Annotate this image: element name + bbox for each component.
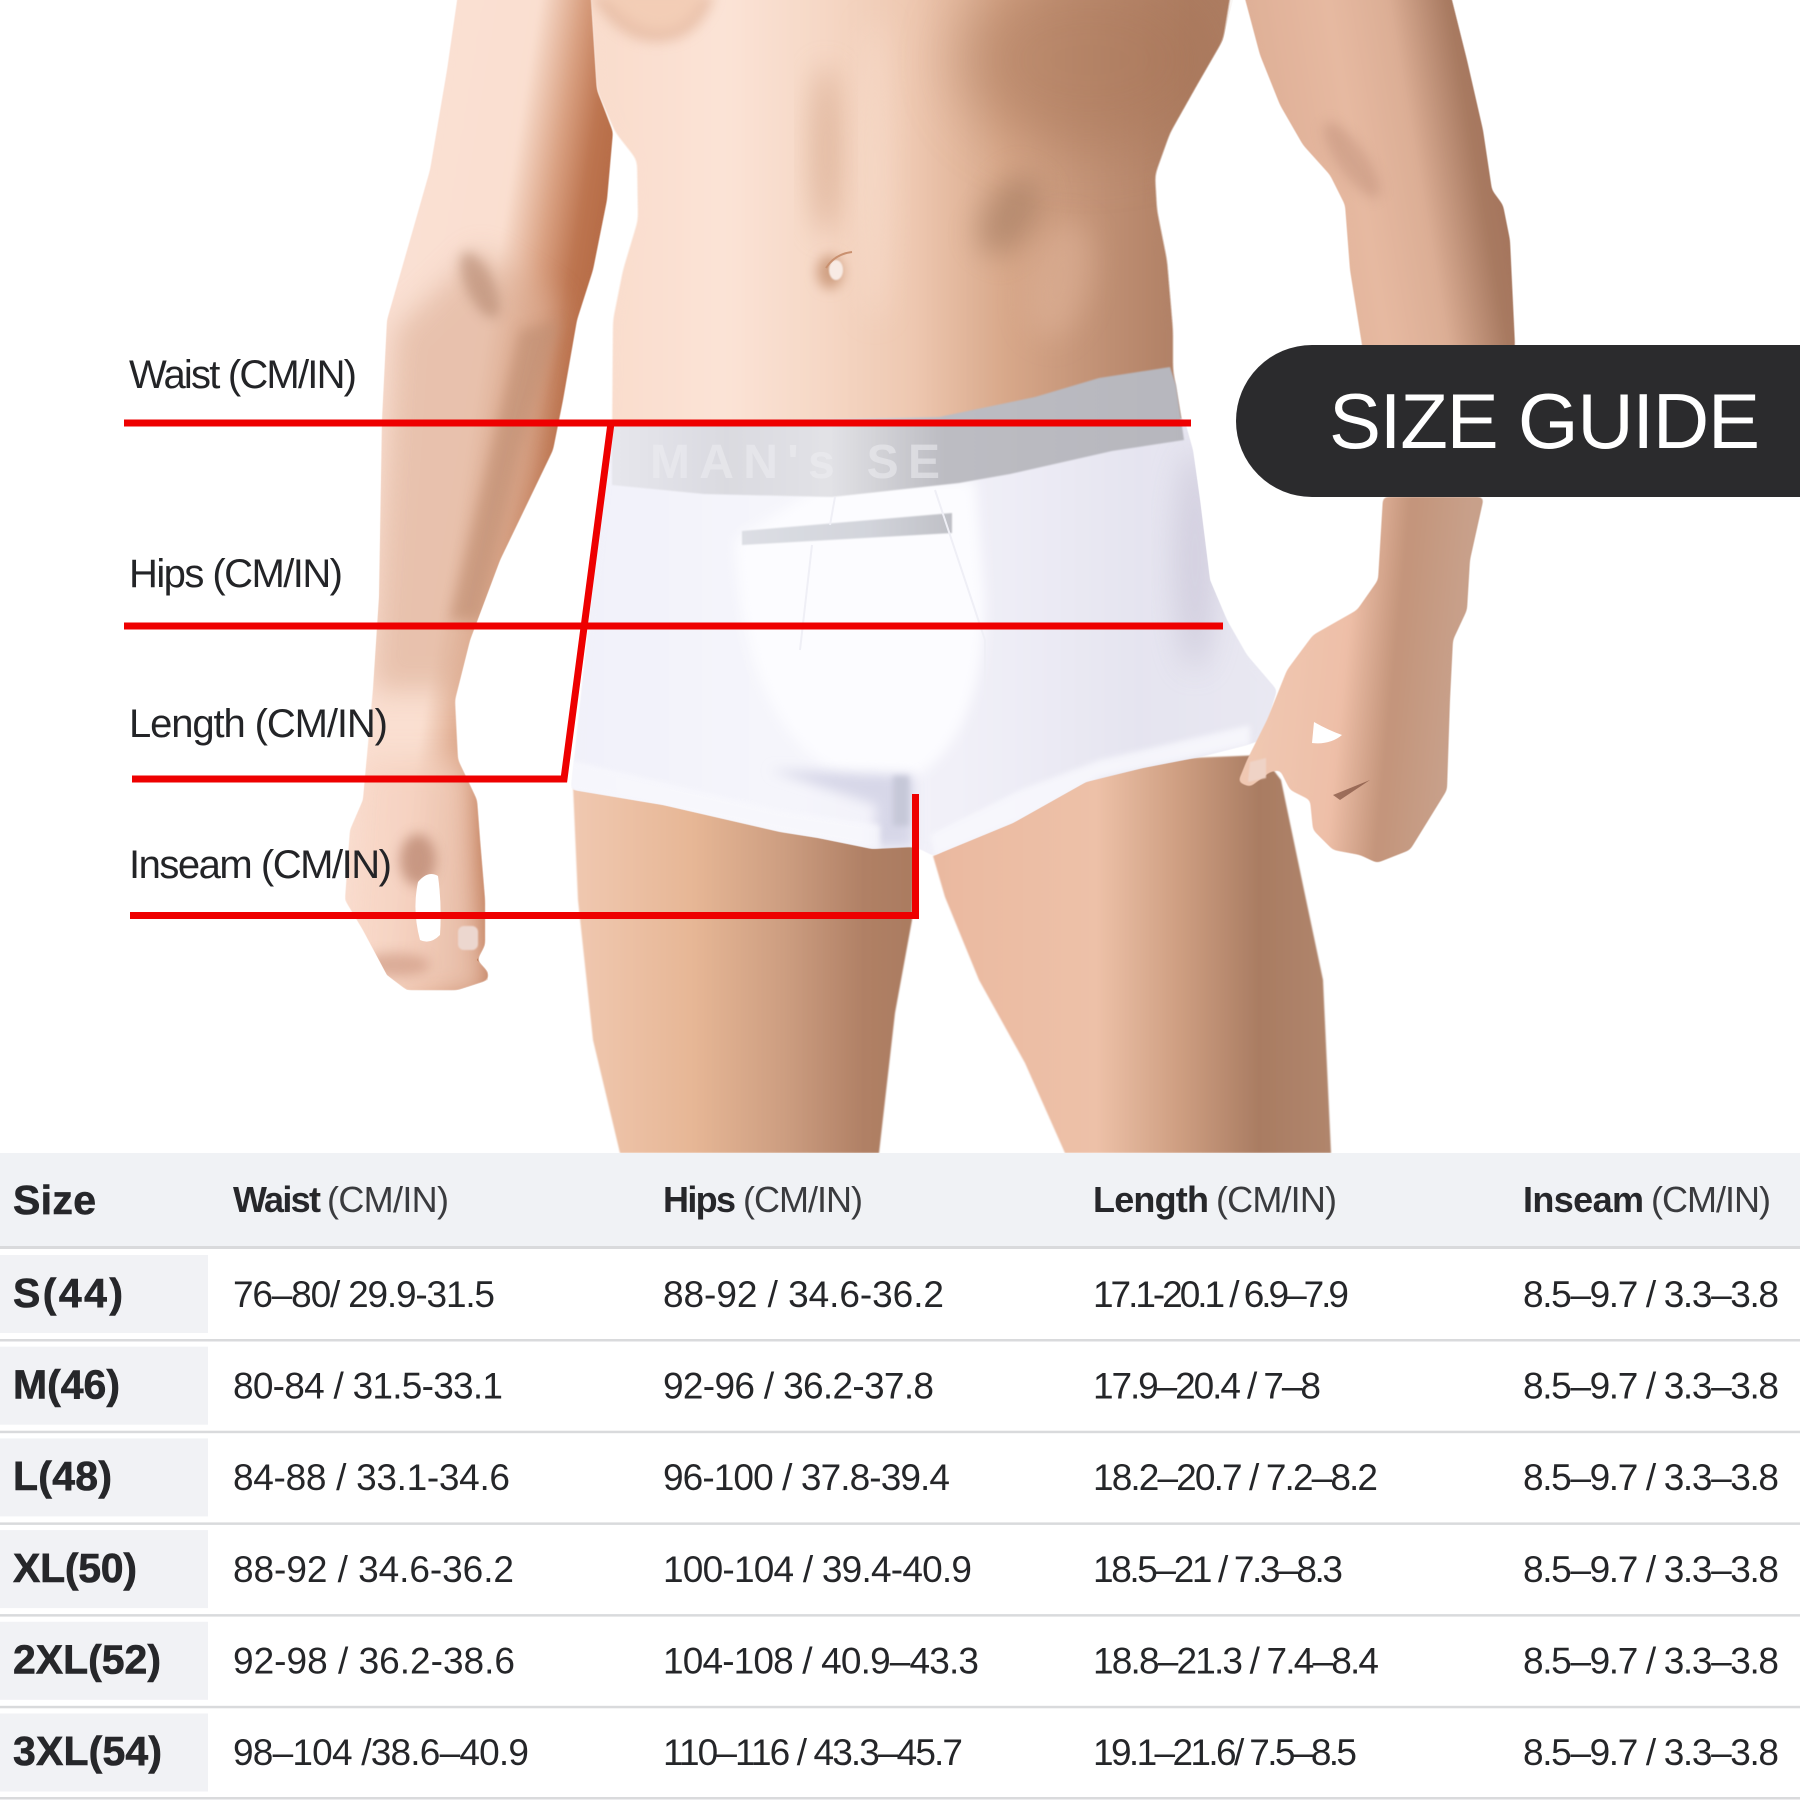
table header [0, 1153, 1800, 1249]
abdominal midline [810, 65, 842, 235]
row: M(46) [0, 1347, 1800, 1433]
label: waist: Waist (CM/IN) [129, 353, 357, 397]
size guide badge [1236, 345, 1800, 497]
row: L(48): 18.2–20.7 / 7.2–8.2 [1093, 1457, 1378, 1498]
seams [800, 490, 985, 700]
table header: Length [1093, 1179, 1209, 1220]
label: inseam: Inseam (CM/IN) [129, 843, 392, 887]
torso [590, 0, 1233, 440]
row: XL(50): 18.5–21 / 7.3–8.3 [1093, 1549, 1343, 1590]
waistband [612, 367, 1184, 497]
row: XL(50): XL(50) [13, 1545, 137, 1591]
label: hips: Hips (CM/IN) [129, 552, 343, 596]
row: 2XL(52): 18.8–21.3 / 7.4–8.4 [1093, 1640, 1379, 1681]
row: XL(50): 8.5–9.7 / 3.3–3.8 [1523, 1549, 1779, 1590]
row: 3XL(54): 98–104 /38.6–40.9 [233, 1732, 529, 1773]
row: L(48): 84-88 / 33.1-34.6 [233, 1457, 510, 1498]
waistband logo: MAN's SE [650, 436, 940, 489]
row: 3XL(54): 3XL(54) [13, 1728, 162, 1774]
white trunks [570, 367, 1277, 856]
row: 3XL(54): 110–116 / 43.3–45.7 [663, 1732, 963, 1773]
table header: (CM/IN) [1216, 1179, 1337, 1220]
measurement line: waist [124, 420, 1191, 426]
navel [817, 255, 843, 289]
oblique shadow [970, 171, 1046, 261]
side shade [1173, 450, 1217, 670]
light band beside midline [868, 85, 889, 254]
left arm and hand [345, 0, 613, 1000]
row: M(46): 92-96 / 36.2-37.8 [663, 1366, 934, 1407]
row: 2XL(52): 92-98 / 36.2-38.6 [233, 1640, 515, 1681]
measurement line: length [132, 423, 611, 779]
measurement line: inseam [130, 794, 916, 916]
row: M(46): 80-84 / 31.5-33.1 [233, 1366, 503, 1407]
pectoral crease [590, 0, 715, 42]
row: L(48) [0, 1438, 1800, 1525]
row: 2XL(52): 2XL(52) [13, 1636, 161, 1682]
row: S(44): 88-92 / 34.6-36.2 [663, 1274, 944, 1315]
pouch highlight [834, 483, 983, 771]
table header: Size [13, 1177, 96, 1223]
row: 3XL(54): 19.1–21.6/ 7.5–8.5 [1093, 1732, 1357, 1773]
row: 2XL(52): 104-108 / 40.9–43.3 [663, 1640, 979, 1681]
row: S(44): 17.1-20.1 / 6.9–7.9 [1093, 1274, 1349, 1315]
row: L(48): 8.5–9.7 / 3.3–3.8 [1523, 1457, 1779, 1498]
size guide badge: SIZE GUIDE [1329, 377, 1760, 465]
table header: (CM/IN) [743, 1179, 863, 1220]
oblique highlight [1034, 228, 1094, 330]
row: L(48): 96-100 / 37.8-39.4 [663, 1457, 950, 1498]
row: M(46): 17.9–20.4 / 7–8 [1093, 1366, 1321, 1407]
row: 3XL(54) [0, 1714, 1800, 1800]
size table [0, 1153, 1800, 1800]
upper right shadow [960, 0, 1220, 150]
row: S(44): S(44) [13, 1270, 123, 1316]
hem highlight [572, 788, 881, 849]
right upper arm and forearm [1245, 0, 1516, 345]
row: 2XL(52) [0, 1622, 1800, 1708]
left thigh [573, 786, 914, 1153]
pouch stripe [742, 513, 952, 545]
row: S(44): 76–80/ 29.9-31.5 [233, 1274, 495, 1315]
table header: Hips [663, 1179, 736, 1220]
row: 2XL(52): 8.5–9.7 / 3.3–3.8 [1523, 1640, 1779, 1681]
photo: model wearing white trunks [345, 0, 1515, 1153]
row: 3XL(54): 8.5–9.7 / 3.3–3.8 [1523, 1732, 1779, 1773]
crotch shadow [770, 770, 913, 847]
right hand [1238, 497, 1484, 863]
table header: (CM/IN) [327, 1179, 449, 1220]
row: M(46): 8.5–9.7 / 3.3–3.8 [1523, 1366, 1779, 1407]
row: S(44) [0, 1255, 1800, 1342]
row: L(48): L(48) [13, 1453, 112, 1499]
table header: (CM/IN) [1651, 1179, 1771, 1220]
table header: Inseam [1523, 1179, 1644, 1220]
label: length: Length (CM/IN) [129, 702, 388, 746]
right thigh [933, 755, 1331, 1153]
row: M(46): M(46) [13, 1362, 120, 1408]
row: S(44): 8.5–9.7 / 3.3–3.8 [1523, 1274, 1779, 1315]
table header: Waist [233, 1179, 321, 1220]
left hand gap [415, 874, 441, 942]
row: XL(50): 100-104 / 39.4-40.9 [663, 1549, 972, 1590]
row: XL(50) [0, 1530, 1800, 1617]
measurement line: hips [124, 622, 1223, 630]
right hand gap [1312, 722, 1342, 743]
row: XL(50): 88-92 / 34.6-36.2 [233, 1549, 514, 1590]
